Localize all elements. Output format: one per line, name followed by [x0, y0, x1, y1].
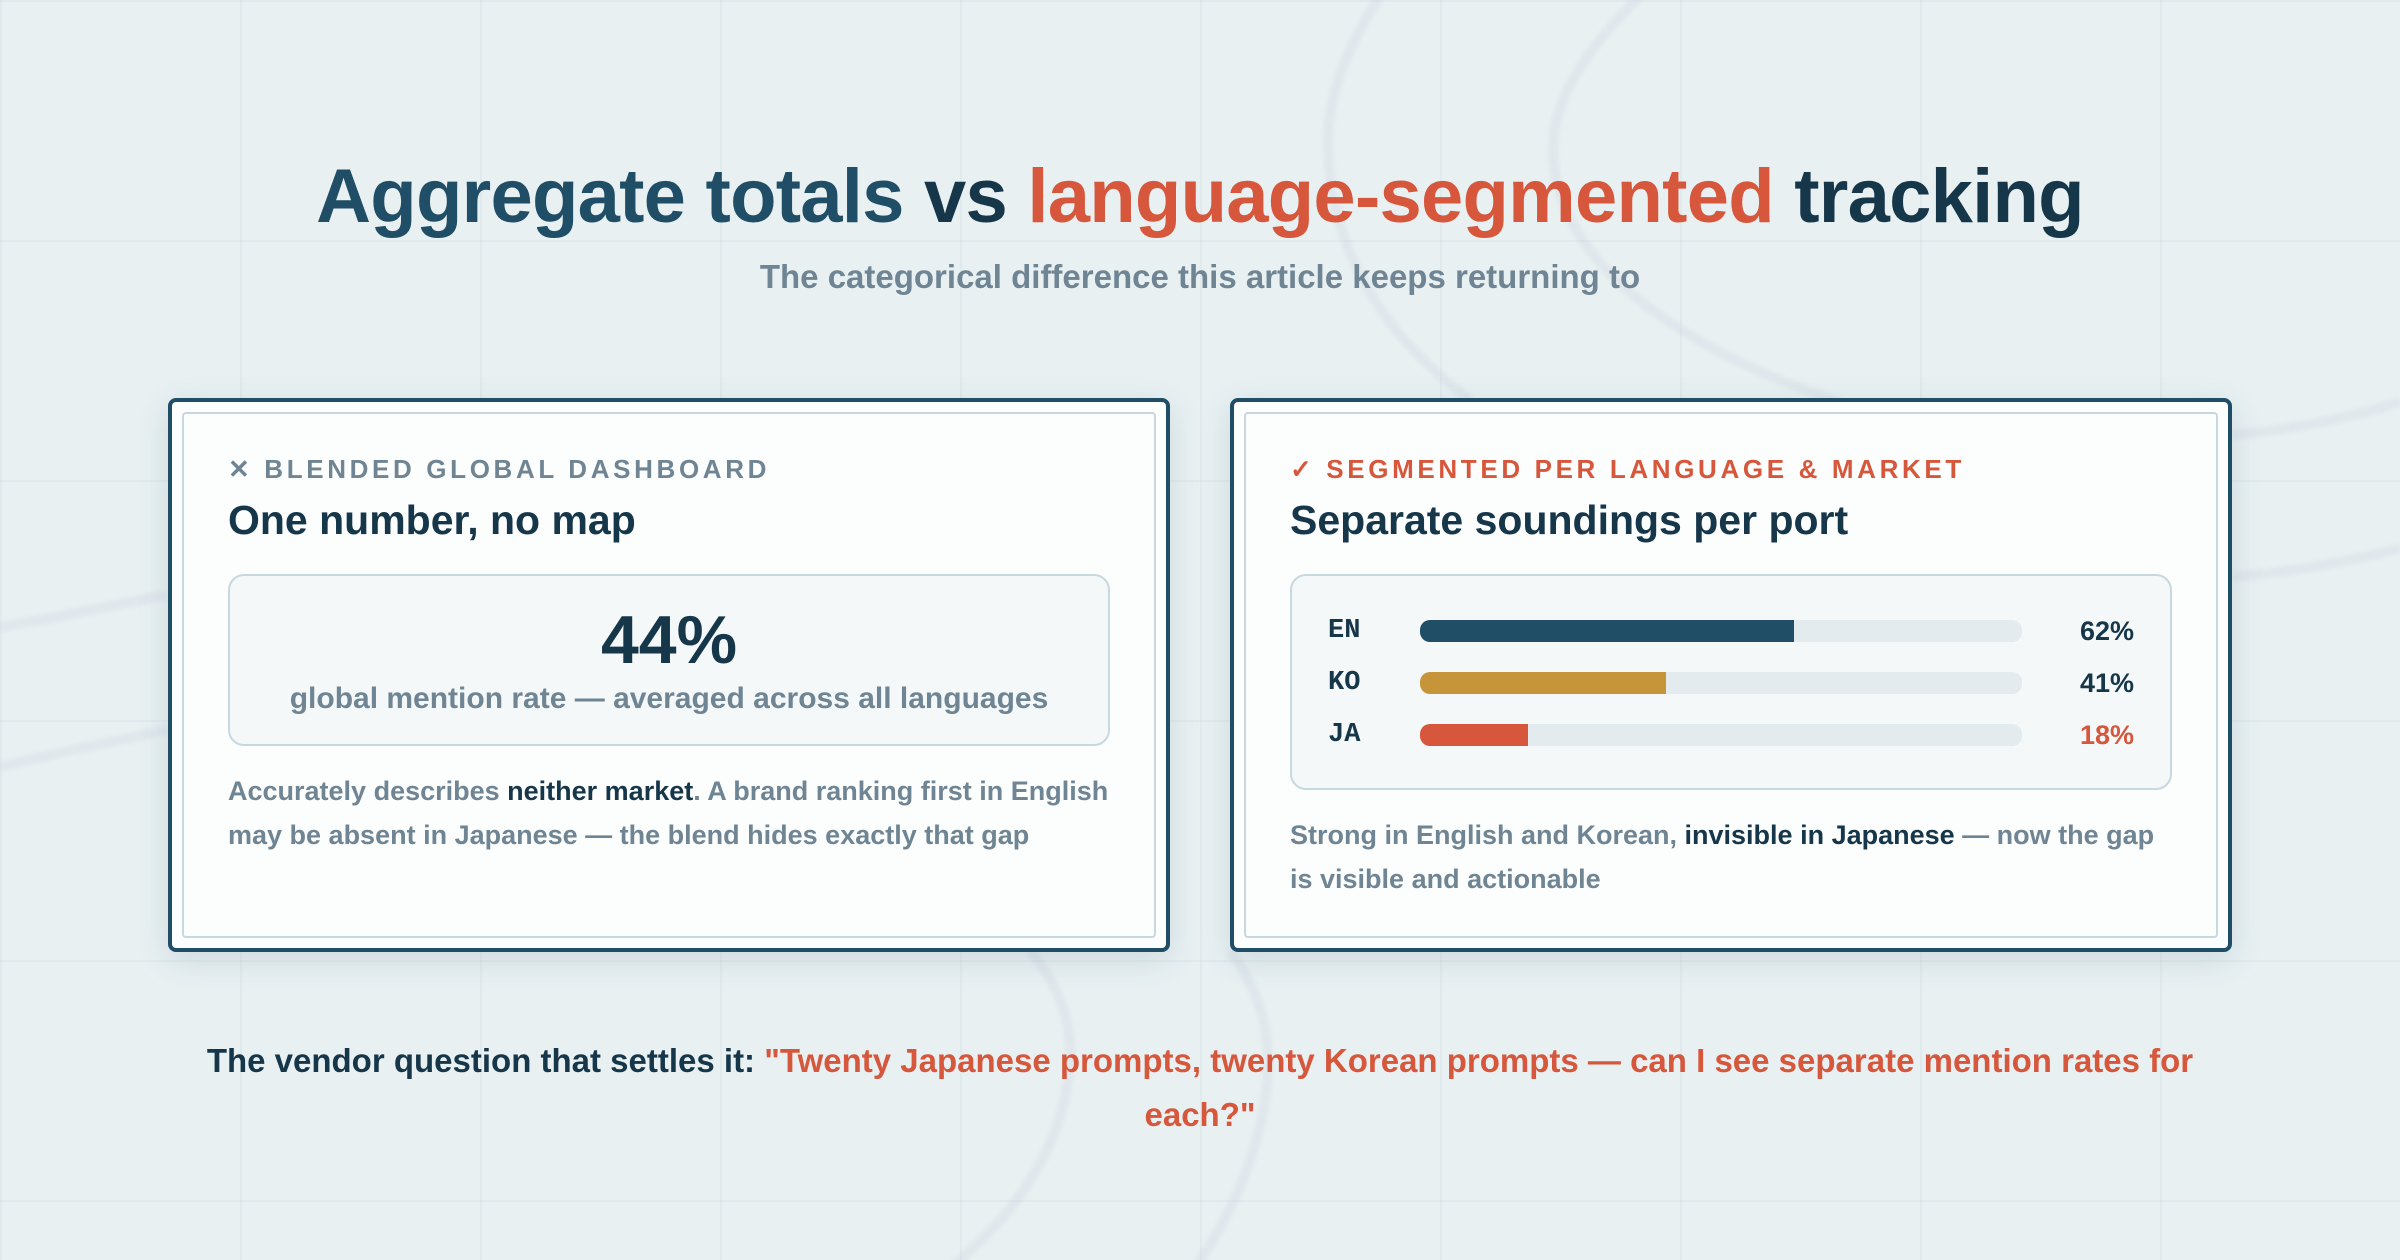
label EN: EN	[1328, 616, 1360, 646]
right kicker: ✓ SEGMENTED PER LANGUAGE & MARKET	[1290, 454, 1965, 484]
subtitle: The categorical difference this article keeps returning to	[760, 258, 1640, 295]
metric caption: global mention rate — averaged across all languages	[290, 682, 1048, 715]
bar JA 18%	[1420, 724, 2022, 746]
right description	[1290, 820, 2154, 894]
bar chart box	[1290, 574, 2172, 790]
label KO: KO	[1328, 668, 1360, 698]
value 62%: 62%	[2080, 616, 2134, 646]
callout: vendor question: The vendor question that settles it: "Twenty Japanese prompts, twenty Korean prompts — can I see separate mention rates for	[207, 1042, 2193, 1079]
left description: Accurately describes neither market. A brand ranking first in English	[228, 776, 1108, 806]
label JA: JA	[1328, 720, 1360, 750]
bar KO 41%	[1420, 672, 2022, 694]
right description: Strong in English and Korean, invisible in Japanese — now the gap	[1290, 820, 2154, 850]
right description: is visible and actionable	[1290, 864, 1601, 894]
metric box	[228, 574, 1110, 746]
value 18%: 18%	[2080, 720, 2134, 750]
bar EN 62%	[1420, 620, 2022, 642]
title: Aggregate totals vs language-segmented tracking	[316, 154, 2084, 239]
right heading: Separate soundings per port	[1290, 497, 1848, 543]
callout: vendor question	[207, 1042, 2193, 1133]
left description	[228, 776, 1108, 850]
big number: 44%: 44%	[601, 602, 737, 678]
callout: vendor question: each?"	[1144, 1096, 1256, 1133]
panel: blended global dashboard	[168, 398, 1170, 952]
left kicker: ✕ BLENDED GLOBAL DASHBOARD	[228, 454, 770, 484]
panel: segmented per language and market	[1230, 398, 2232, 952]
left heading: One number, no map	[228, 497, 636, 543]
left description: may be absent in Japanese — the blend hides exactly that gap	[228, 820, 1029, 850]
value 41%: 41%	[2080, 668, 2134, 698]
